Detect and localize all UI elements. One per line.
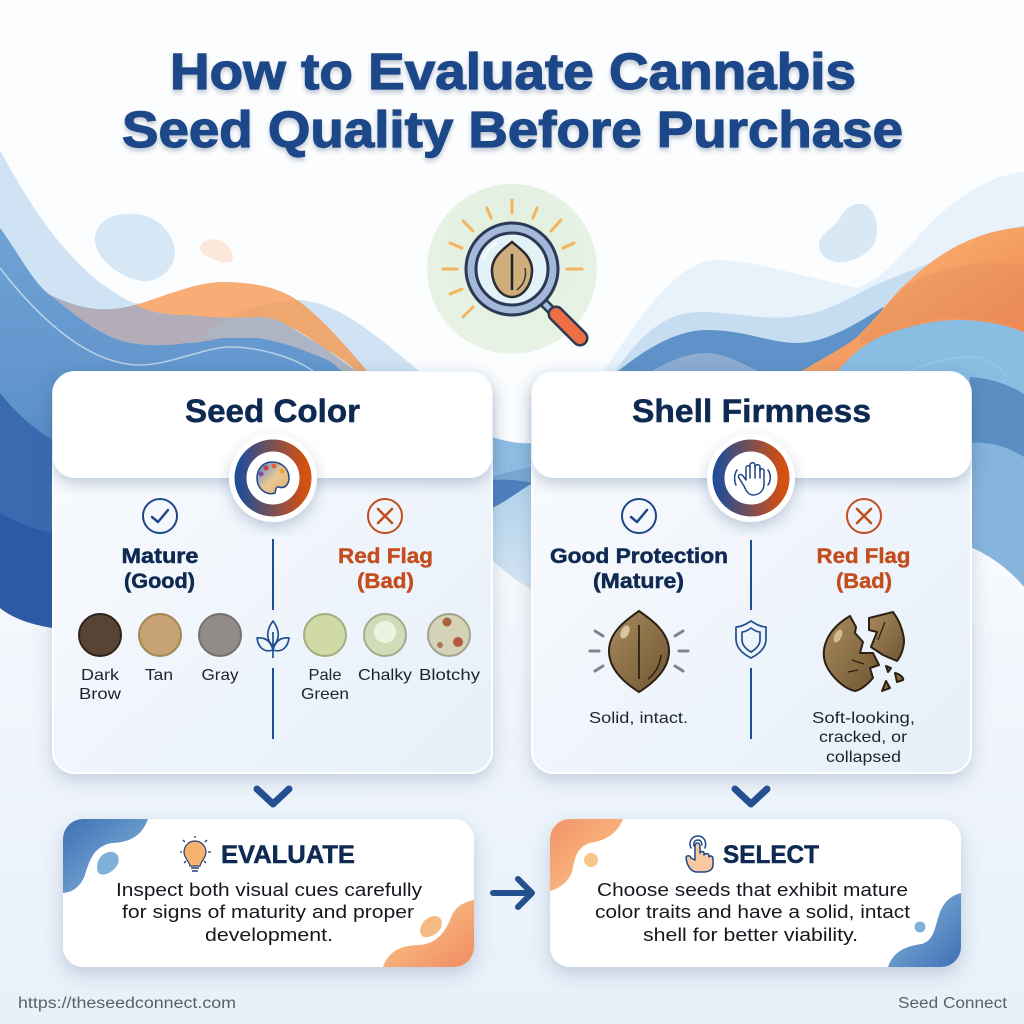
- swatch labels: Tan: [145, 667, 173, 684]
- body text: Inspect both visual cues carefully: [116, 879, 423, 900]
- heading: Seed Color: [185, 393, 360, 429]
- panel body: [532, 372, 971, 773]
- arrow: evaluate to select: [493, 879, 532, 907]
- title: How to Evaluate Cannabis: [170, 43, 856, 100]
- panel header: [53, 372, 492, 478]
- background blob: orange dot: [741, 277, 764, 300]
- label: good protection mature: [550, 545, 728, 593]
- label: red flag bad: [338, 545, 433, 593]
- label: red flag bad: (Bad): [357, 570, 414, 593]
- swatch labels: [79, 667, 480, 703]
- label: red flag bad: [816, 545, 910, 593]
- swatch labels: Chalky: [358, 667, 412, 684]
- body text: development.: [205, 924, 333, 945]
- title: Seed Quality Before Purchase: [122, 101, 903, 158]
- label: mature good: [122, 545, 198, 593]
- icon: cross: [847, 499, 881, 533]
- body text: [116, 879, 423, 945]
- card: evaluate: [63, 819, 474, 967]
- divider: [272, 539, 274, 739]
- icon: pointing hand: [686, 836, 713, 872]
- footer: brand: Seed Connect: [898, 995, 1008, 1012]
- icon: cracked seed: [824, 612, 904, 691]
- divider: [750, 540, 752, 739]
- icon: check: [622, 499, 656, 533]
- footer: url: https://theseedconnect.com: [18, 995, 236, 1012]
- title: [122, 43, 903, 158]
- body text: Choose seeds that exhibit mature: [597, 879, 908, 900]
- icon: sprout: [257, 621, 289, 658]
- background waves: left: [0, 150, 420, 628]
- panel: shell firmness: [532, 372, 971, 773]
- label: mature good: Mature: [122, 545, 198, 568]
- icon: shield: [736, 621, 766, 658]
- background blob: peach: [200, 239, 233, 263]
- caption: bad: Soft-looking,: [812, 710, 915, 727]
- caption: bad: collapsed: [826, 749, 901, 766]
- chevron arrow: right: [735, 789, 767, 804]
- swatches: red flag: [304, 614, 470, 656]
- label: red flag bad: (Bad): [836, 570, 892, 593]
- decoration: corners: [63, 819, 474, 967]
- panel: seed color: [53, 372, 492, 773]
- label: good protection mature: (Mature): [593, 570, 684, 593]
- hero icon: magnifying glass over seed: [427, 184, 597, 354]
- heading: EVALUATE: [221, 841, 355, 869]
- background blob: pale blue right: [819, 204, 877, 262]
- body text: color traits and have a solid, intact: [595, 901, 910, 922]
- swatch labels: Dark: [81, 667, 120, 684]
- decoration: corners: [550, 819, 961, 967]
- body text: for signs of maturity and proper: [122, 901, 414, 922]
- swatch labels: Gray: [202, 667, 238, 684]
- heading: SELECT: [723, 841, 819, 869]
- body text: shell for better viability.: [643, 924, 858, 945]
- background blob: pale blue left: [95, 214, 175, 281]
- label: good protection mature: Good Protection: [550, 545, 728, 568]
- caption: bad: cracked, or: [819, 729, 908, 746]
- caption: bad: [812, 710, 915, 766]
- background waves: right: [603, 172, 1024, 587]
- card: select: [550, 819, 961, 967]
- icon: lightbulb: [180, 836, 211, 871]
- swatch labels: Brow: [79, 686, 122, 703]
- icon: intact seed: [590, 611, 688, 692]
- label: red flag bad: Red Flag: [816, 545, 910, 568]
- icon: cross: [368, 499, 402, 533]
- label: red flag bad: Red Flag: [338, 545, 433, 568]
- chevron arrow: left: [257, 789, 289, 804]
- icon badge: hand: [707, 434, 795, 522]
- panel header: [532, 372, 971, 478]
- swatches: mature: [79, 614, 241, 656]
- icon: check: [143, 499, 177, 533]
- caption: good: Solid, intact.: [589, 710, 688, 727]
- swatch labels: Pale: [308, 667, 342, 684]
- panel body: [53, 372, 492, 773]
- swatch labels: Blotchy: [419, 667, 480, 684]
- background waves: gap between panels: [492, 437, 532, 590]
- icon badge: palette: [229, 434, 317, 522]
- heading: Shell Firmness: [632, 393, 871, 429]
- label: mature good: (Good): [124, 570, 195, 593]
- swatch labels: Green: [301, 686, 349, 703]
- body text: [595, 879, 910, 945]
